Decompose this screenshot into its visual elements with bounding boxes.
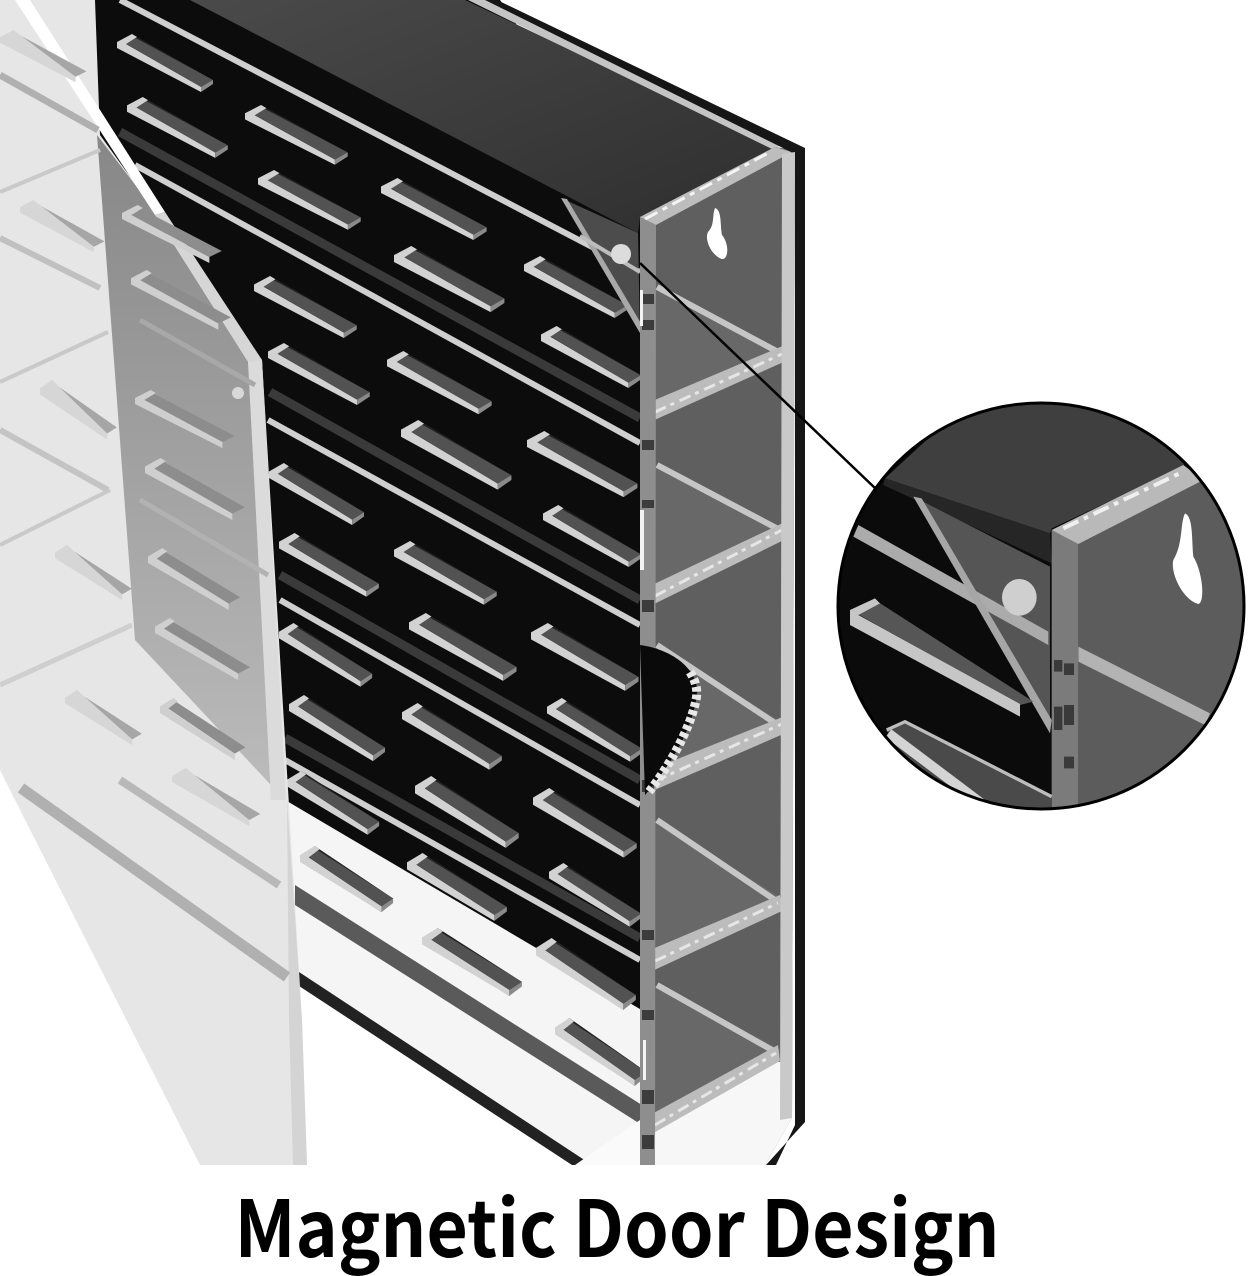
magnifier: glass plate [913, 497, 1050, 730]
magnifier: rim highlight [1063, 472, 1183, 528]
magnifier: bar lip [850, 598, 1020, 717]
magnifier: dark band [883, 478, 1052, 563]
magnifier: bar interior [853, 600, 1033, 705]
door: clear acrylic [0, 0, 307, 1165]
magnifier: column glints [1054, 660, 1074, 768]
magnifier: lower bar [886, 724, 1052, 808]
curved cut-out view [640, 645, 697, 795]
magnifier: rail left [853, 525, 1048, 645]
bottom open compartment [650, 1062, 792, 1165]
magnifier: lower bar lip [886, 730, 984, 800]
magnet [611, 244, 631, 264]
keyhole [707, 208, 727, 259]
callout leader line [640, 263, 877, 490]
magnified detail circle [838, 400, 1248, 833]
back panel: black [95, 0, 645, 1015]
top rim of side panel [640, 147, 792, 225]
magnifier: lower bar rim [887, 722, 1052, 797]
door: grey stripes [0, 75, 287, 977]
right clear edge [780, 152, 795, 1120]
magnifier: column [1052, 530, 1078, 820]
magnifier: top panel [885, 400, 1200, 533]
shelf front edges [650, 345, 788, 1135]
magnifier: side panel [1078, 482, 1242, 804]
glass magnet plate [561, 198, 642, 333]
top panel [190, 0, 780, 233]
back panel: white lower section [285, 800, 645, 1165]
magnifier: keyhole [1173, 513, 1202, 604]
front column [640, 217, 656, 1165]
magnifier: side rail [1078, 647, 1210, 725]
side panel: grey compartments [640, 147, 795, 1165]
shelf rails on back panel [120, 0, 640, 960]
bottom white mask [0, 1165, 1248, 1276]
right black edge [485, 0, 805, 1165]
door: bars seen through acrylic [0, 30, 260, 826]
magnifier: rim [1052, 465, 1203, 544]
magnifier: glass edge [913, 497, 1052, 733]
compartment bars on back panel [117, 34, 646, 1086]
door magnet [232, 387, 244, 399]
magnifier: magnet [1002, 579, 1037, 616]
